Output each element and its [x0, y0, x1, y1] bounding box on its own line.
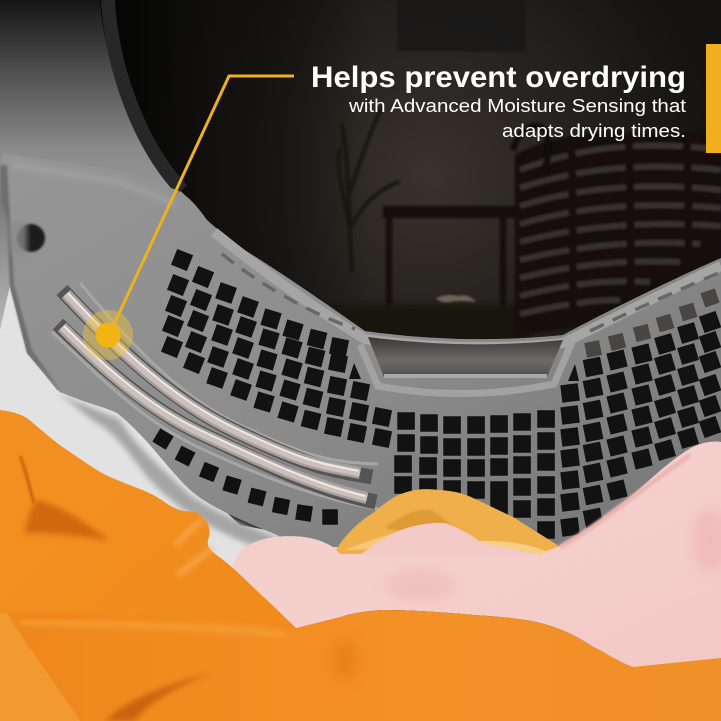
heading: Helps prevent overdrying: [311, 61, 686, 94]
mounting hole: [17, 224, 45, 252]
yellow accent bar: [706, 44, 721, 153]
top metal bar: [66, 294, 360, 473]
sensor surround: [80, 283, 378, 464]
plate highlight: [12, 165, 176, 204]
recess shadows: [62, 290, 372, 477]
pink garment: [232, 441, 721, 670]
flap top lit band: [20, 622, 285, 635]
door gasket band: [108, 0, 182, 190]
orange garment front: [0, 610, 721, 721]
grey lint screen housing: [0, 153, 721, 580]
floor: [300, 305, 530, 345]
grid cells: right block: [570, 322, 710, 527]
sensor bars: [52, 283, 384, 510]
grid cells: centre block: [403, 419, 546, 530]
cast shadow on the lip: [57, 392, 285, 545]
triangular cut-outs beside the notch: [349, 363, 579, 381]
crease shadow: [24, 500, 110, 541]
callout text: [311, 61, 686, 141]
marker dot: [96, 322, 120, 348]
pink hump: [360, 523, 540, 555]
left lower flap: [0, 613, 80, 721]
yellow garment: [336, 489, 559, 555]
pink seam and shading: [560, 455, 690, 547]
plant: [339, 108, 398, 270]
raised frame below notch: [360, 342, 572, 394]
grid cells: left block: [172, 260, 382, 438]
white dryer lip below the vent plate: [0, 170, 345, 620]
plate shading: [0, 165, 60, 390]
description: with Advanced Moisture Sensing that: [348, 95, 686, 116]
rim highlight: [214, 232, 721, 347]
dryer drum wall, upper left: [0, 0, 190, 200]
picture frame on the wall: [398, 0, 524, 51]
orange garment behind, left: [0, 410, 296, 680]
callout leader line with sensor marker: [83, 76, 294, 360]
pale underside: [470, 541, 548, 555]
rim rib marks: [222, 254, 721, 331]
lower slots under the sensor bars: [163, 439, 330, 517]
notch in the screen rim: [368, 337, 563, 377]
darker fold: [385, 510, 462, 540]
lit top row of right grid: [593, 298, 710, 349]
callout text: adapts drying times.: [502, 120, 686, 141]
sensor highlight halo: [83, 310, 133, 360]
leader line: [110, 76, 294, 333]
wicker basket: [515, 130, 721, 335]
bench: [383, 206, 518, 306]
bottom metal bar: [62, 327, 367, 498]
gathered cuff highlight: [176, 520, 212, 575]
flap under-shadow: [105, 672, 215, 721]
